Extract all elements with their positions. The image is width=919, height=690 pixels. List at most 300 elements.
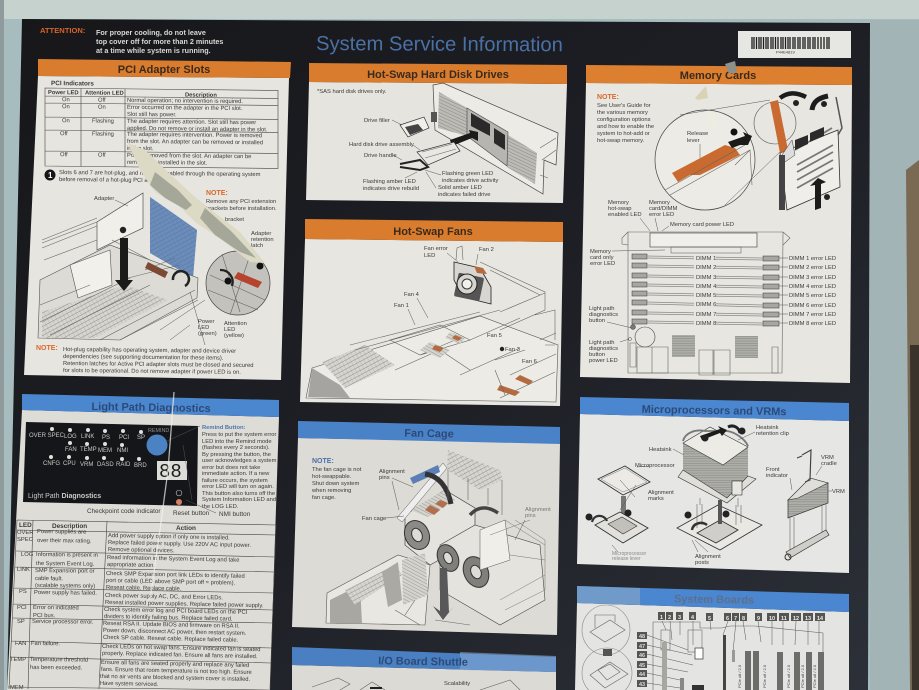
- board numbered callouts: 45: [639, 663, 645, 669]
- LED action table: Error on indicated: [33, 605, 79, 612]
- LED action table: fans. Ensure that room temperature is not too high. Ensure: [101, 667, 252, 676]
- System Boards heading band: [577, 586, 849, 612]
- panel callouts: Reset button: [173, 510, 210, 517]
- processor labels: [612, 463, 675, 562]
- drive assembly: [400, 142, 460, 170]
- board outline and slots: PCIe x8 / 2.0: [800, 664, 805, 688]
- peeling tape residue: [128, 143, 265, 263]
- panel callouts: NMI button: [219, 511, 251, 518]
- fan cage note: when removing: [311, 488, 351, 494]
- fan labels: LED: [424, 253, 435, 259]
- operator panel: VRM: [80, 462, 93, 468]
- PCI indicators table: On: [62, 118, 70, 124]
- operator panel: MEM: [98, 448, 112, 454]
- fan labels: Fan 5: [487, 333, 502, 339]
- PCI indicators table: [45, 80, 278, 168]
- heatsink: Heatsink: [756, 425, 779, 431]
- board numbered callouts: 5: [708, 616, 711, 622]
- memory note: [597, 94, 654, 144]
- LED action table: LED: [19, 522, 32, 529]
- remind button note: user acknowledges a system: [202, 458, 277, 464]
- board numbered callouts: 9: [757, 616, 760, 622]
- memory board top labels: error LED: [590, 261, 615, 267]
- DIMM board diagram: DIMM 5: [696, 293, 716, 299]
- PCI indicators table: Flashing: [92, 132, 114, 138]
- attention notice: ATTENTION:: [40, 26, 85, 35]
- latch and LED labels: Power: [198, 319, 215, 325]
- PCI indicators table: Normal operation; no intervention is required.: [127, 98, 243, 105]
- PCI indicators table: Error occurred on the adapter in the PCI slot.: [127, 105, 243, 112]
- LED action table: Have system serviced.: [100, 681, 159, 688]
- LED action table: Check SP cable. Reseat cable. Replace failed cable.: [103, 635, 239, 644]
- LED action table: that no air vents are blocked and system cover is installed.: [100, 674, 251, 683]
- DIMM board diagram: DIMM 1 error LED: [789, 256, 836, 262]
- fan labels: [394, 246, 537, 365]
- slots note with number badge: [44, 170, 261, 184]
- HDD heading band: Hot-Swap Hard Disk Drives: [367, 69, 509, 81]
- PCI indicators table: Slot still has power.: [127, 112, 177, 118]
- panel: hot-swap hard disk drives: *SAS hard disk drives only.: [317, 89, 387, 95]
- VRM and cradle: indicator: [766, 473, 788, 479]
- latch and LED labels: (green): [198, 331, 217, 337]
- remind button note: the LOG LED.: [202, 504, 239, 510]
- panel: microprocessors and VRMs: [577, 397, 849, 573]
- barcode label: P44E4819: [776, 50, 795, 54]
- attention notice: For proper cooling, do not leave: [96, 28, 206, 37]
- operator panel: DASD: [97, 462, 114, 468]
- Light Path heading band: Light Path Diagnostics: [91, 401, 211, 415]
- PCI indicators table: Off: [60, 131, 68, 137]
- PCI indicators table: On: [98, 105, 106, 111]
- LED action table: Replace failed power supply. Use 220V AC input power.: [108, 540, 251, 549]
- release lever detail: Release: [687, 131, 708, 137]
- processor labels: release lever: [612, 556, 641, 562]
- PCI indicators table: Off: [60, 152, 68, 158]
- VRM and cradle: VRM: [821, 455, 834, 461]
- memory note: hot-swap memory.: [597, 138, 645, 144]
- title: System Service Information: [316, 33, 563, 56]
- PCI indicators table: removed or installed in the slot.: [127, 160, 208, 167]
- board outline and slots: PCIe x8 / 2.0: [737, 664, 742, 688]
- Memory heading band: Memory Cards: [680, 70, 756, 82]
- attention notice: top cover off for more than 2 minutes: [96, 37, 223, 46]
- board numbered callouts: 43: [639, 682, 645, 688]
- memory note: the various memory: [597, 110, 648, 116]
- LED action table: Action: [176, 525, 196, 532]
- LED action table: Fan failure.: [31, 641, 60, 647]
- Fans heading band: [305, 219, 563, 242]
- LED action table: Description: [52, 523, 87, 530]
- attention notice: [40, 26, 223, 55]
- board outline and slots: [647, 621, 824, 690]
- remind button note: failure occurs, the system: [202, 478, 268, 484]
- PCI indicators table: Description: [185, 92, 217, 99]
- memory board top labels: enabled LED: [608, 212, 642, 218]
- PCI indicators table: from the slot. An adapter can be removed or installed: [127, 139, 263, 146]
- server chassis front: [431, 83, 558, 194]
- hot-plug note: Retention latches for Active PCI adapter slots must be closed and secured: [63, 361, 253, 369]
- hot-plug note: dependencies (see supporting documentation for these items).: [63, 354, 224, 362]
- PCI adapter illustration: [38, 193, 205, 345]
- board numbered callouts: 48: [639, 634, 645, 640]
- LED action table: the System Event Log.: [36, 561, 95, 568]
- LED action table: Power supplies are: [37, 529, 86, 536]
- processor labels: Microprocessor: [612, 551, 647, 557]
- PCI note: NOTE:: [206, 190, 228, 197]
- LED action table: SPEC: [17, 537, 33, 543]
- LED action table: TEMP: [10, 657, 26, 663]
- remind button note: Remind Button:: [202, 425, 246, 431]
- LED action table: Reseat RSA II. Update BIOS and firmware on RSA II.: [103, 621, 240, 630]
- memory board top labels: diagnostics: [589, 312, 618, 318]
- operator panel: CPU: [63, 461, 76, 467]
- LED action table: port or cable (LED above SMP port off = problem).: [106, 578, 236, 587]
- heatsink: [649, 425, 789, 503]
- LED action table: PS: [19, 589, 27, 595]
- remind button note: [202, 425, 277, 510]
- fan cage labels: Alignment: [525, 507, 551, 513]
- operator panel: FAN: [65, 447, 77, 453]
- Light Path heading band: [22, 394, 279, 417]
- PCI indicators table: Power removed from the slot. An adapter can be: [127, 153, 251, 160]
- latch and LED labels: bracket: [225, 217, 244, 223]
- memory board top labels: Light path: [589, 306, 614, 312]
- operator panel: NMI: [117, 448, 128, 454]
- board numbered callouts: 14: [817, 616, 824, 622]
- DIMM board diagram: DIMM 4 error LED: [789, 284, 836, 290]
- retention latch detail: [206, 251, 270, 315]
- board numbered callouts: 8: [742, 616, 745, 622]
- heatsink socket: posts: [695, 560, 709, 566]
- board numbered callouts: 11: [781, 616, 787, 622]
- fan labels: Fan 3: [505, 347, 520, 353]
- operator panel: CNFG: [43, 461, 60, 467]
- latch and LED labels: Adapter: [251, 231, 271, 237]
- PCI indicators table: The adapter requires intervention. Power is removed: [127, 132, 262, 139]
- fan labels: Fan 4: [404, 292, 420, 298]
- LED action table: PCI: [17, 605, 27, 611]
- DIMM board diagram: DIMM 8: [696, 321, 716, 327]
- drive labels: Solid amber LED: [438, 185, 482, 191]
- panel: hot-swap hard disk drives: [306, 63, 567, 203]
- LED action table: Service processor error.: [32, 619, 94, 626]
- LED action table: FAN: [15, 641, 26, 647]
- DIMM board diagram: DIMM 3: [696, 275, 716, 281]
- drive labels: Hard disk drive assembly: [349, 142, 414, 148]
- slots note with number badge: Slots 6 and 7 are hot-plug, and must be disabled through the operating system: [59, 170, 261, 178]
- LED action table: Add power supply option if only one is installed.: [108, 533, 230, 542]
- fan cage labels: Alignment: [379, 469, 405, 475]
- operator panel: OVER SPEC: [29, 433, 65, 439]
- processor labels: Microprocessor: [635, 463, 675, 469]
- LED action table: LINK: [17, 567, 30, 573]
- PCI indicators table: The adapter requires attention. Slot still has power: [127, 119, 256, 126]
- hot-plug note: Hot-plug capability has operating system, adapter and device driver: [63, 347, 236, 355]
- heatsink socket: Alignment: [695, 554, 721, 560]
- memory note: NOTE:: [597, 94, 619, 101]
- board numbered callouts: 2: [668, 615, 671, 621]
- remind button note: Press to put the system error: [202, 432, 276, 438]
- LED action table: OVER: [17, 530, 33, 536]
- PCI heading band: PCI Adapter Slots: [118, 64, 210, 76]
- hot-plug note: NOTE:: [36, 345, 58, 352]
- heatsink: Heatsink: [649, 447, 672, 453]
- fan cage labels: pins: [379, 475, 390, 481]
- Fans heading band: Hot-Swap Fans: [393, 226, 473, 238]
- board numbered callouts: 46: [639, 653, 645, 659]
- removed fan module: [454, 246, 491, 304]
- LED action table: cable fault.: [35, 576, 63, 582]
- DIMM board diagram: DIMM 7 error LED: [789, 312, 836, 318]
- LED action table: Reseat cable. Replace cable.: [106, 585, 182, 593]
- fan cage note: NOTE:: [312, 458, 334, 465]
- operator panel: SP: [137, 435, 145, 441]
- panel: memory cards: [580, 65, 852, 383]
- panel: I/O board shuttle: [292, 647, 556, 690]
- PCI indicators table: in the slot.: [127, 146, 154, 152]
- lock details: [582, 605, 632, 690]
- remind button note: (flashes every 2 seconds).: [202, 445, 270, 451]
- DIMM board diagram: DIMM 6: [696, 302, 716, 308]
- LED action table: Remove optional devices.: [108, 547, 175, 554]
- drive labels: indicates drive activity: [442, 178, 498, 184]
- fan cage note: Shut down system: [312, 481, 360, 487]
- board outline and slots: PCIe x8 / 2.0: [786, 664, 791, 688]
- board numbered callouts: 10: [769, 616, 775, 622]
- heatsink socket: [677, 498, 762, 566]
- LED action table: PCI bus.: [33, 613, 56, 619]
- LED action table: over their max rating.: [37, 538, 92, 545]
- latch and LED labels: LED: [198, 325, 209, 331]
- operator panel: 88: [159, 461, 182, 483]
- HDD heading band: [309, 63, 567, 84]
- DIMM board diagram: DIMM 2: [696, 265, 716, 271]
- hot-plug note: [36, 345, 253, 376]
- drive labels: indicates drive rebuild: [363, 186, 419, 192]
- I/O heading band: [292, 647, 556, 672]
- panel: fan cage: [292, 421, 560, 635]
- LED action table: Temperature threshold: [30, 657, 88, 664]
- LED action table: appropriate action.: [107, 562, 155, 569]
- board numbered callouts: 6: [726, 616, 729, 622]
- drive labels: Flashing amber LED: [363, 179, 416, 185]
- PCI adapter illustration: Adapter: [94, 196, 114, 202]
- glare streak across left column: [150, 392, 174, 600]
- board outline and slots: PCIe x8 / 2.0: [812, 664, 817, 688]
- latch and LED labels: LED: [224, 327, 235, 333]
- Microprocessors heading band: [580, 397, 849, 421]
- slots note with number badge: before removal of a hot-plug PCI adapter.: [59, 177, 166, 184]
- fan cage exploded drawing: [326, 450, 545, 625]
- remind button note: LED into the Remind mode: [202, 439, 272, 445]
- LED action table: Check system error log and PCI board LEDs on the PCI: [104, 607, 248, 616]
- I/O heading band: I/O Board Shuttle: [378, 655, 468, 669]
- memory card illustration: [754, 93, 842, 210]
- fan labels: Fan 1: [394, 303, 409, 309]
- PCI indicators table: Off: [98, 98, 106, 104]
- fan labels: Fan 6: [522, 359, 537, 365]
- latch and LED labels: Attention: [224, 321, 247, 327]
- board numbered callouts: 1: [660, 615, 663, 621]
- LED action table: Check SMP Expansion port link LEDs to identify failed: [106, 571, 245, 580]
- operator panel: BRD: [134, 463, 147, 469]
- remind button note: immediate action. If a new: [202, 471, 270, 477]
- latch and LED labels: [198, 217, 274, 339]
- DIMM board diagram: DIMM 1: [696, 256, 716, 262]
- memory board top labels: hot-swap: [608, 206, 632, 212]
- remind button note: error but does not take: [202, 465, 260, 471]
- memory board top labels: button: [589, 318, 605, 324]
- fan labels: Fan 2: [479, 247, 494, 253]
- memory board top labels: Memory: [590, 249, 611, 255]
- Memory heading band: [586, 65, 852, 85]
- LED action table: Check LEDs on hot swap fans. Ensure indicated fan is seated: [102, 644, 261, 653]
- operator panel: PS: [102, 435, 110, 441]
- PCI heading band: [38, 59, 291, 78]
- barcode label: [738, 31, 851, 58]
- LED action table: [8, 520, 276, 690]
- memory board top labels: Memory: [608, 200, 629, 206]
- board numbered callouts: 7: [734, 616, 737, 622]
- drive labels: Drive handle: [364, 153, 397, 159]
- processor labels: Alignment: [648, 490, 674, 496]
- Fan Cage heading band: Fan Cage: [404, 428, 454, 440]
- LED action table: SMP Expansion port or: [35, 568, 95, 575]
- VRM and cradle: Front: [766, 467, 780, 473]
- panel: hot-swap fans: [300, 219, 563, 406]
- latch and LED labels: (yellow): [224, 333, 244, 339]
- memory board top labels: [589, 200, 734, 364]
- drive labels: Drive filler: [364, 118, 390, 124]
- operator panel: TEMP: [80, 447, 97, 453]
- LED action table: Power down, disconnect AC power, then restart system.: [103, 628, 247, 637]
- panel callouts: Checkpoint code indicator: [87, 508, 161, 515]
- PCI indicators table: PCI Indicators: [51, 80, 94, 88]
- fan cage labels: Fan cage: [362, 516, 386, 522]
- LED action table: Information is present in: [36, 552, 98, 559]
- panel: system boards: [575, 586, 849, 690]
- PCI indicators table: applied. Do not remove or install an adapter in the slot.: [127, 126, 268, 133]
- fan cage note: fan cage.: [312, 495, 336, 501]
- LED action table: properly. Replace indicated fan. Ensure all fans are installed.: [102, 651, 258, 660]
- PCI note: Remove any PCI extension: [206, 199, 276, 205]
- memory board top labels: diagnostics: [589, 346, 618, 352]
- PCI indicators table: On: [62, 97, 70, 103]
- slots note with number badge: 1: [48, 171, 53, 180]
- operator panel: RAID: [116, 462, 131, 468]
- drive labels: indicates failed drive: [438, 192, 491, 198]
- DIMM board diagram: DIMM 8 error LED: [789, 321, 836, 327]
- memory board top labels: Memory: [649, 200, 670, 206]
- shuttle drawing fragments: Scalability: [444, 681, 470, 687]
- drive filler: [400, 117, 429, 137]
- LED action table: dividers to identify failing bus. Replace failed card.: [104, 614, 233, 623]
- processor and socket: [586, 466, 650, 552]
- DIMM board diagram: DIMM 3 error LED: [789, 275, 836, 281]
- hot-plug note: for slots to be operational. Do not remove adapter if power LED is on.: [63, 368, 241, 376]
- DIMM board diagram: DIMM 4: [696, 284, 717, 290]
- board numbered callouts: 13: [805, 616, 811, 622]
- attention notice: at a time while system is running.: [96, 46, 211, 55]
- processor labels: marks: [648, 496, 664, 502]
- memory board top labels: Memory card power LED: [670, 222, 734, 228]
- latch and LED labels: retention: [251, 237, 274, 243]
- operator panel: Light Path Diagnostics: [28, 493, 101, 500]
- VRM and cradle: VRM: [832, 489, 845, 495]
- release lever detail: lever: [687, 138, 700, 144]
- fan cage labels: [362, 469, 551, 540]
- board outline and slots: PCIe x8 / 2.0: [762, 664, 767, 688]
- Microprocessors heading band: Microprocessors and VRMs: [642, 404, 787, 418]
- board numbered callouts: [603, 612, 825, 688]
- operator panel: REMIND: [148, 428, 169, 434]
- memory board top labels: Light path: [589, 340, 614, 346]
- VRM and cradle: [766, 450, 845, 560]
- panel: light path diagnostics: [7, 394, 279, 690]
- insertion arrow: [450, 130, 478, 146]
- PCI indicators table: Attention LED: [85, 90, 124, 97]
- board numbered callouts: 12: [793, 616, 799, 622]
- memory board top labels: card/DIMM: [649, 206, 678, 212]
- LED action table: SP: [17, 619, 25, 625]
- operator panel: [23, 422, 198, 506]
- board numbered callouts: 3: [678, 615, 681, 621]
- panel callouts: [87, 426, 251, 518]
- fan cage note: The fan cage is not: [312, 467, 362, 473]
- fan cage labels: pins: [525, 513, 536, 519]
- memory note: configuration options: [597, 117, 651, 123]
- PCI indicators table: Flashing: [92, 119, 114, 125]
- LED action table: has been exceeded.: [30, 665, 83, 672]
- LED action table: Reseat installed power supplies. Replace failed power supply.: [105, 600, 264, 609]
- fan labels: Fan error: [424, 246, 448, 252]
- fan cage note: [311, 458, 362, 501]
- LED action table: (scalable systems only): [35, 583, 95, 590]
- LED action table: Power supply has failed.: [34, 590, 97, 597]
- shuttle drawing fragments: [312, 678, 520, 690]
- remind button note: This button also turns off the: [202, 491, 275, 497]
- PCI indicators table: On: [62, 104, 70, 110]
- tape scraps on memory panel: [695, 61, 737, 125]
- memory board top labels: button: [589, 352, 605, 358]
- VRM and cradle: cradle: [821, 461, 837, 467]
- LED action table: Ensure all fans are seated properly and replace any failed: [101, 660, 249, 669]
- memory note: and how to enable the: [597, 124, 654, 130]
- DIMM board diagram: [622, 232, 836, 375]
- DIMM board diagram: DIMM 5 error LED: [789, 293, 836, 299]
- drive labels: Flashing green LED: [442, 171, 493, 177]
- server chassis drawing: [306, 262, 558, 402]
- remind button note: System Information LED and: [202, 497, 276, 503]
- drive labels: [349, 118, 498, 198]
- board numbered callouts: 4: [691, 615, 695, 621]
- PCI indicators table: Power LED: [48, 90, 79, 96]
- board numbered callouts: 44: [639, 672, 646, 678]
- DIMM board diagram: DIMM 2 error LED: [789, 265, 836, 271]
- operator panel: LINK: [81, 434, 94, 440]
- board numbered callouts: 47: [639, 644, 645, 650]
- memory board top labels: power LED: [589, 358, 618, 364]
- Fan Cage heading band: [298, 421, 560, 444]
- System Boards heading band: System Boards: [674, 593, 754, 607]
- DIMM board diagram: DIMM 7: [696, 312, 716, 318]
- memory board top labels: card only: [590, 255, 614, 261]
- remind button note: By pressing the button, the: [202, 452, 271, 458]
- DIMM board diagram: DIMM 6 error LED: [789, 303, 836, 309]
- memory note: system to hot-add or: [597, 131, 650, 137]
- fan cage note: hot-swappable.: [312, 474, 352, 480]
- operator panel: PCI: [119, 435, 129, 441]
